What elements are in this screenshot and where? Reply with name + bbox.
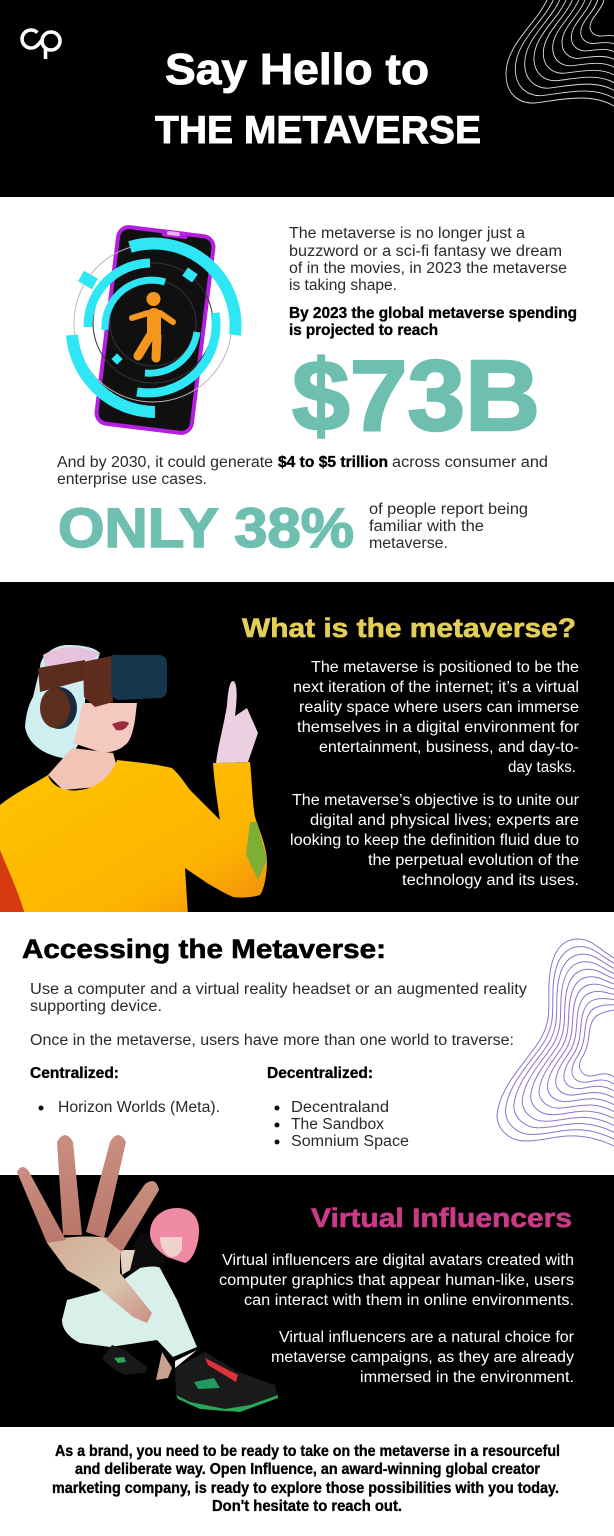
text: campaigns: Virtual influencers are a natural choice for [279,1329,574,1346]
list: centralized: Centralized: [30,1065,119,1082]
text: familiarity: metaverse. [369,535,448,552]
text: definition of virtual influencers [219,1252,574,1309]
text: objective: technology and its uses. [402,872,579,889]
text: 2030 projection: enterprise use cases. [57,471,207,488]
text: closing call to action [52,1443,560,1515]
heading: what is the metaverse: What is the metaverse? [242,613,576,643]
text: spending lead-in: is projected to reach [289,322,438,339]
text: objective: The metaverse’s objective is to unite our [292,792,579,809]
text: spending lead-in: By 2023 the global metaverse spending [289,305,577,322]
text: campaigns: metaverse campaigns, as they are already [271,1349,574,1366]
text: objective [290,792,579,889]
text: familiarity: familiar with the [369,518,484,535]
text: definition: reality space where users can immerse [299,699,579,716]
text: definition of virtual influencers: can interact with them in online environments. [244,1292,574,1309]
text: 2030 projection [57,454,548,488]
text: access instructions: Once in the metaverse, users have more than one world to traverse: [30,1032,514,1049]
text: familiarity [369,501,528,552]
text: closing call to action: Don't hesitate to reach out. [212,1498,402,1515]
decorative contour lines top right [506,0,614,106]
icon: logo [22,30,60,59]
stat: $73B: $73B [292,340,540,452]
text: closing call to action: marketing company, is ready to explore those possibilities with you today. [52,1480,559,1497]
list: decentralized: Decentralized: [267,1065,373,1082]
list: decentralized: Somnium Space [291,1133,409,1150]
heading: accessing the metaverse: Accessing the Metaverse: [22,934,386,964]
text: access instructions [30,981,527,1049]
text: definition: next iteration of the internet; it’s a virtual [293,679,579,696]
list: centralized [30,1065,220,1116]
text: access instructions: Use a computer and a virtual reality headset or an augmented reality [30,981,527,998]
list: decentralized: The Sandbox [291,1116,384,1133]
text: objective: the perpetual evolution of the [368,852,579,869]
text: definition: themselves in a digital environment for [297,719,579,736]
text: spending lead-in [289,305,577,339]
icon: orange figure [132,292,173,358]
text: intro: The metaverse is no longer just a [289,225,525,242]
title [155,45,481,152]
text: intro [289,225,567,294]
text: familiarity: of people report being [369,501,528,518]
illustration: virtual influencer reaching out [17,1135,278,1412]
illustration: phone with rings [72,226,236,434]
text: definition: day tasks. [508,759,576,776]
heading: virtual influencers: Virtual Influencers [311,1203,572,1233]
text: objective: digital and physical lives; experts are [310,812,579,829]
text: intro: is taking shape. [289,277,397,294]
list: decentralized [267,1065,409,1150]
text: 2030 projection: across consumer and [392,454,548,471]
text: campaigns [271,1329,574,1386]
text: closing call to action: and deliberate way. Open Influence, an award-winning global creator [75,1461,540,1478]
stat: only 38%: ONLY 38% [58,496,354,559]
panel: header [0,0,614,197]
text: definition [293,659,579,776]
decorative contour lines [497,939,614,1146]
text: access instructions: supporting device. [30,998,162,1015]
panel: what is the metaverse [0,582,614,915]
panel: spending intro [57,225,577,559]
text: campaigns: immersed in the environment. [360,1369,574,1386]
list: centralized: Horizon Worlds (Meta). [58,1099,220,1116]
text: 2030 projection: $4 to $5 trillion [278,454,388,471]
text: closing call to action: As a brand, you need to be ready to take on the metaverse in a resourceful [55,1443,560,1460]
panel: virtual influencers [0,1135,614,1427]
text: definition: The metaverse is positioned to be the [311,659,579,676]
text: intro: of in the movies, in 2023 the metaverse [289,260,567,277]
text: intro: buzzword or a sci-fi fantasy we dream [289,243,562,260]
title: THE METAVERSE [155,109,481,152]
list: decentralized: Decentraland [291,1099,389,1116]
text: definition: entertainment, business, and day-to- [319,739,579,756]
illustration: woman in VR headset [0,645,267,915]
text: objective: looking to keep the definition fluid due to [290,832,579,849]
text: 2030 projection: And by 2030, it could generate [57,454,273,471]
panel: accessing the metaverse [22,934,614,1150]
text: definition of virtual influencers: computer graphics that appear human-like, users [219,1272,574,1289]
title: Say Hello to [165,45,429,94]
text: definition of virtual influencers: Virtual influencers are digital avatars created with [222,1252,574,1269]
